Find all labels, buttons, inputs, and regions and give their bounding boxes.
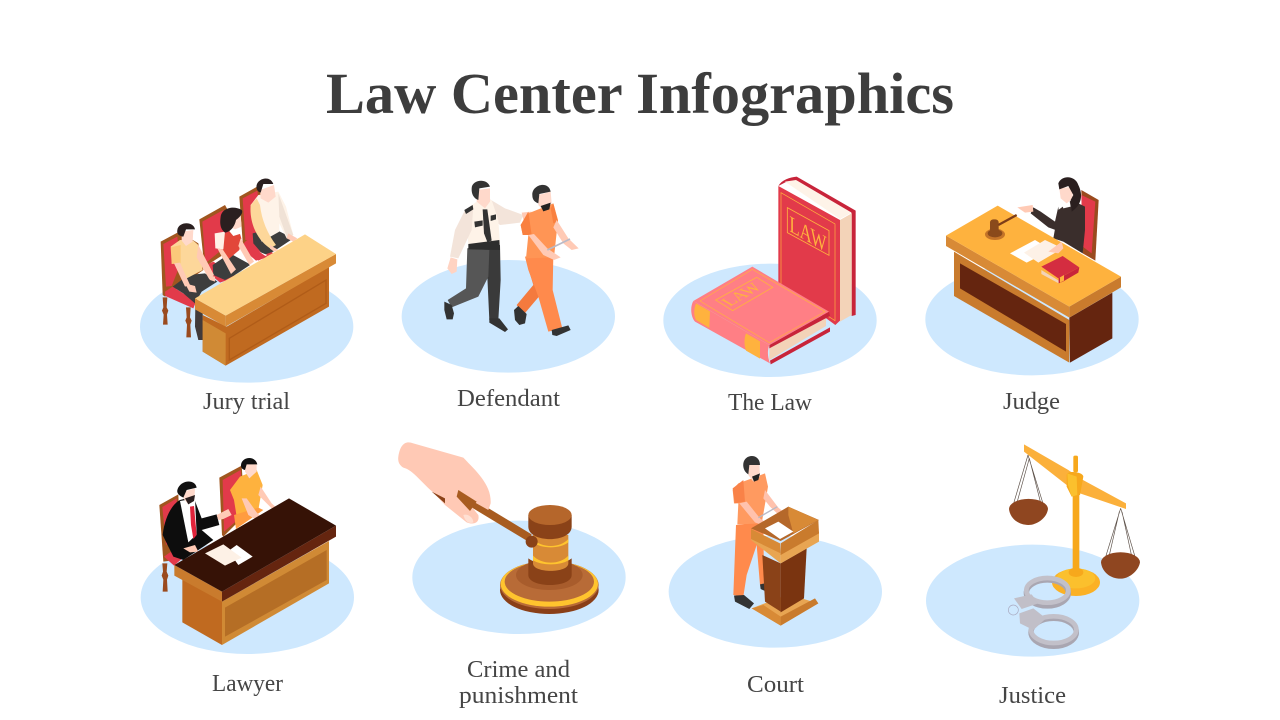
label: Court xyxy=(747,672,804,698)
illustration: hand with gavel xyxy=(398,442,626,634)
panel: court xyxy=(669,456,882,698)
panel: judge xyxy=(925,177,1139,415)
law text on lying book: LAW xyxy=(717,280,766,309)
illustration: judge at desk xyxy=(925,177,1139,375)
panel: jury trial xyxy=(140,179,353,415)
panel: lawyer xyxy=(141,458,354,697)
title: Law Center Infographics xyxy=(326,61,954,126)
illustration: jury at bench xyxy=(140,179,353,383)
illustration: law books xyxy=(663,177,877,377)
label: Justice xyxy=(999,683,1066,709)
panel: the law xyxy=(663,177,877,416)
panel: crime and punishment xyxy=(398,442,626,709)
illustration: officer escorting defendant xyxy=(402,181,615,373)
illustration: lawyer and client at desk xyxy=(141,458,354,654)
panel: justice xyxy=(926,444,1140,709)
label: Lawyer xyxy=(212,671,283,697)
label: Judge xyxy=(1003,389,1060,415)
label: Defendant xyxy=(457,386,560,412)
illustration: scales and handcuffs xyxy=(926,444,1140,657)
label: The Law xyxy=(728,390,813,416)
label: Jury trial xyxy=(203,389,290,415)
label: Crime and xyxy=(467,657,570,683)
illustration: defendant at lectern xyxy=(669,456,882,648)
label line 2: punishment xyxy=(459,683,578,709)
law text on standing book: LAW xyxy=(789,211,826,258)
panel: defendant xyxy=(402,181,615,412)
